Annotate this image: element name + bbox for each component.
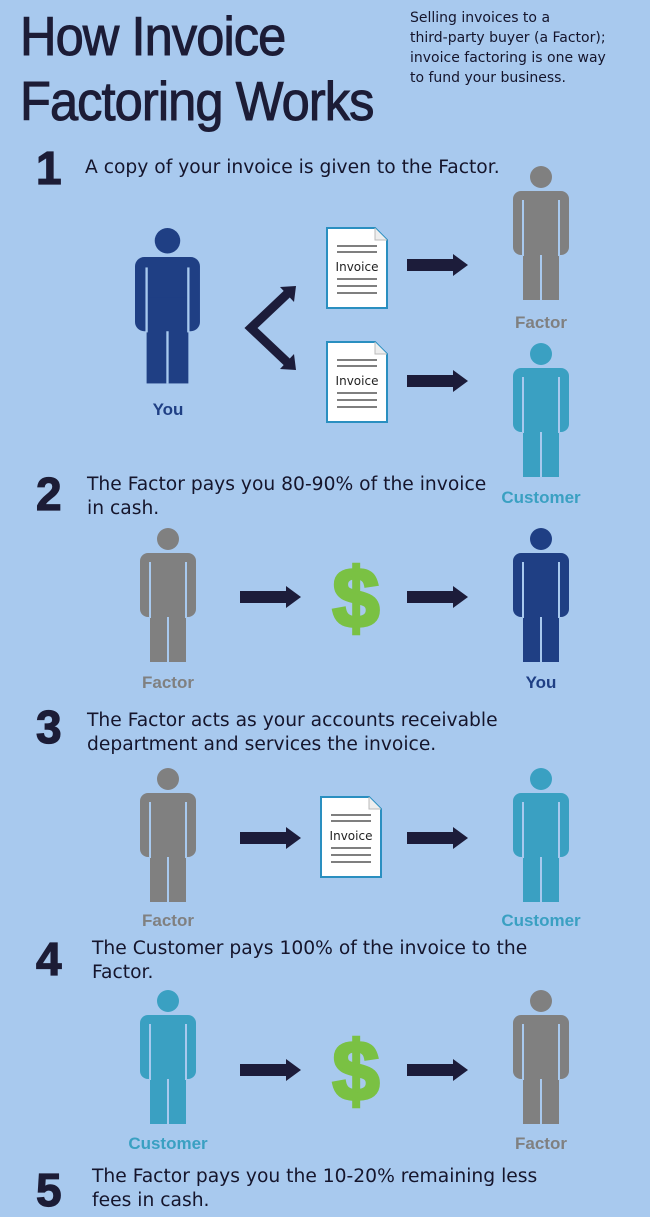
person: Customer 3	[501, 768, 581, 930]
subtitle: to fund your business.	[410, 70, 566, 86]
arrow 2b	[407, 586, 468, 608]
person: You: You	[153, 400, 183, 419]
arrow 2a	[240, 586, 301, 608]
step 4 heading: The Customer pays 100% of the invoice to the	[91, 938, 527, 959]
person: Customer	[501, 343, 581, 507]
step 4 heading	[36, 933, 527, 985]
subtitle: Selling invoices to a	[410, 10, 550, 26]
dollar: $	[333, 551, 379, 645]
subtitle	[410, 10, 606, 86]
arrow: split chevron	[251, 286, 296, 370]
person: Factor 2: Factor	[142, 673, 194, 692]
person: Factor 3	[140, 768, 196, 930]
doc 2	[327, 342, 387, 422]
person: Customer 4	[128, 990, 208, 1153]
person: Factor	[513, 166, 569, 332]
step 4 heading: 4	[36, 933, 62, 985]
step 5 heading	[36, 1164, 537, 1216]
step 5 heading: 5	[36, 1164, 62, 1216]
step 1 heading	[36, 142, 500, 194]
person: Factor: Factor	[515, 313, 567, 332]
step 1 heading: A copy of your invoice is given to the Factor.	[85, 157, 500, 178]
person: Factor 4: Factor	[515, 1134, 567, 1153]
subtitle: invoice factoring is one way	[410, 50, 606, 66]
arrow 4a	[240, 1059, 301, 1081]
person: Factor 3: Factor	[142, 911, 194, 930]
step 3 heading	[36, 701, 498, 755]
person: Customer: Customer	[501, 488, 581, 507]
title: Factoring Works	[20, 71, 373, 132]
person: Factor 4	[513, 990, 569, 1153]
step 5 heading: fees in cash.	[92, 1190, 209, 1211]
step 2 heading	[36, 468, 486, 520]
arrow 4b	[407, 1059, 468, 1081]
doc 1	[327, 228, 387, 308]
arrow 1b	[407, 370, 468, 392]
arrow 3b	[407, 827, 468, 849]
arrow 1a	[407, 254, 468, 276]
person: Customer 3: Customer	[501, 911, 581, 930]
step 2 heading: 2	[36, 468, 62, 520]
dollar 2: $	[333, 1024, 379, 1118]
person: You	[135, 228, 200, 419]
person: Factor 2	[140, 528, 196, 692]
step 5 heading: The Factor pays you the 10-20% remaining less	[91, 1166, 537, 1187]
person: You 2	[513, 528, 569, 692]
subtitle: third-party buyer (a Factor);	[410, 30, 606, 46]
title	[20, 6, 373, 132]
step 3 heading: The Factor acts as your accounts receivable	[86, 710, 498, 731]
title: How Invoice	[20, 6, 285, 67]
step 2 heading: in cash.	[87, 498, 159, 519]
step 1 heading: 1	[36, 142, 62, 194]
step 3 heading: 3	[36, 701, 62, 753]
person: You 2: You	[526, 673, 556, 692]
arrow 3a	[240, 827, 301, 849]
person: Customer 4: Customer	[128, 1134, 208, 1153]
doc 3	[321, 797, 381, 877]
step 2 heading: The Factor pays you 80-90% of the invoice	[86, 474, 486, 495]
step 4 heading: Factor.	[92, 962, 153, 983]
step 3 heading: department and services the invoice.	[87, 734, 436, 755]
